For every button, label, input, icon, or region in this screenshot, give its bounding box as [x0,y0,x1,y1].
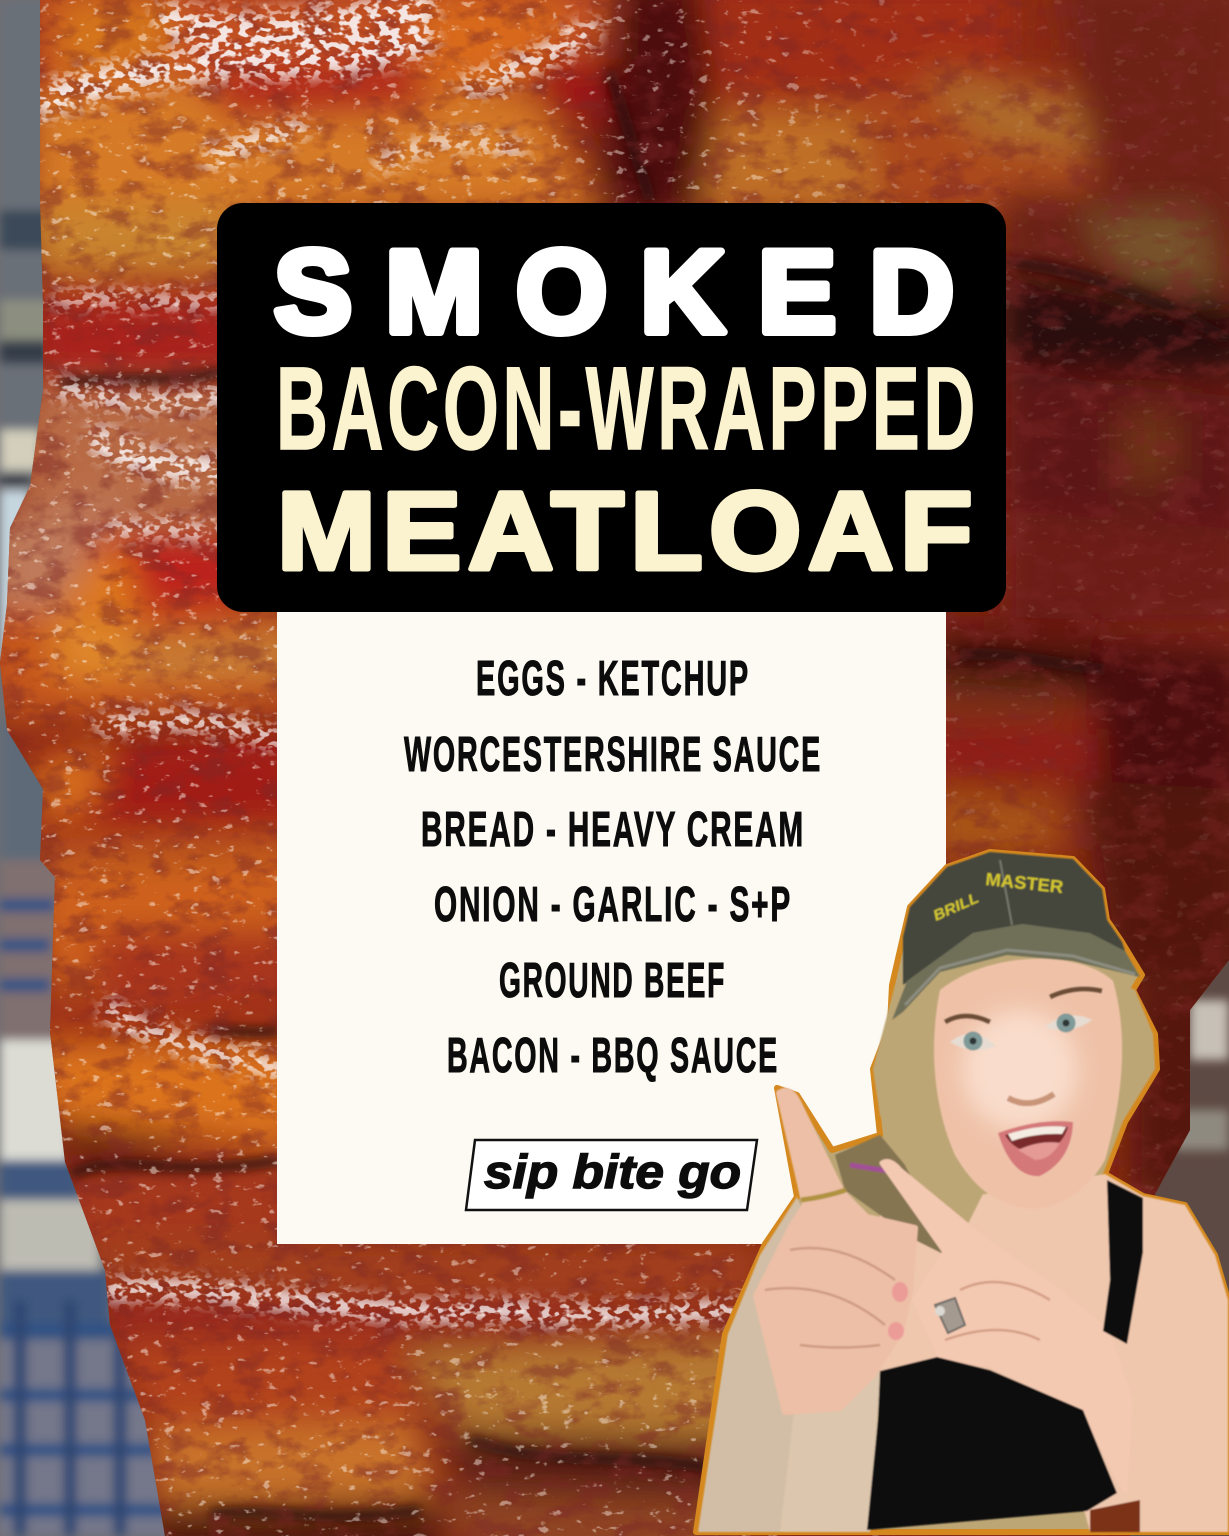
ingredient line 4: ONION - GARLIC - S+P [434,878,792,932]
cap [892,852,1140,1020]
cap embroidery: MASTER [985,869,1064,897]
cap embroidery [931,869,1064,925]
ingredients list [404,652,822,1083]
hand: raised fist with index finger [756,1091,915,1412]
black tank top [867,1180,1143,1530]
panel: ingredients card [277,600,946,1244]
heading: MEATLOAF: MEATLOAF [277,470,979,593]
heading: SMOKED: SMOKED [274,226,954,357]
skin: arms and chest [880,1174,1228,1532]
left side [20,205,240,275]
right side [1000,190,1229,300]
hand: sideways pointing with ring [882,1162,1130,1490]
ingredient line 5: GROUND BEEF [499,954,726,1008]
nose [1008,1094,1054,1103]
orange cutout outline [696,852,1228,1532]
cap embroidery: BRILL [931,890,981,925]
bottom [90,1240,760,1300]
top [40,0,634,112]
ingredient line 6: BACON - BBQ SAUCE [447,1029,779,1083]
hair [873,975,1155,1260]
logo: sip bite go [466,1140,757,1210]
face [934,959,1122,1209]
silver glaze highlights [40,0,740,1338]
ingredient line 3: BREAD - HEAVY CREAM [421,803,805,857]
photo: woman in cap pointing [696,852,1228,1532]
mouth [998,1121,1073,1176]
logo: sip bite go: sip bite go [484,1145,741,1198]
ingredient line 1: EGGS - KETCHUP [476,652,750,706]
eyes [945,989,1102,1050]
ingredient line 2: WORCESTERSHIRE SAUCE [404,728,822,782]
panel: title box [217,203,1006,612]
